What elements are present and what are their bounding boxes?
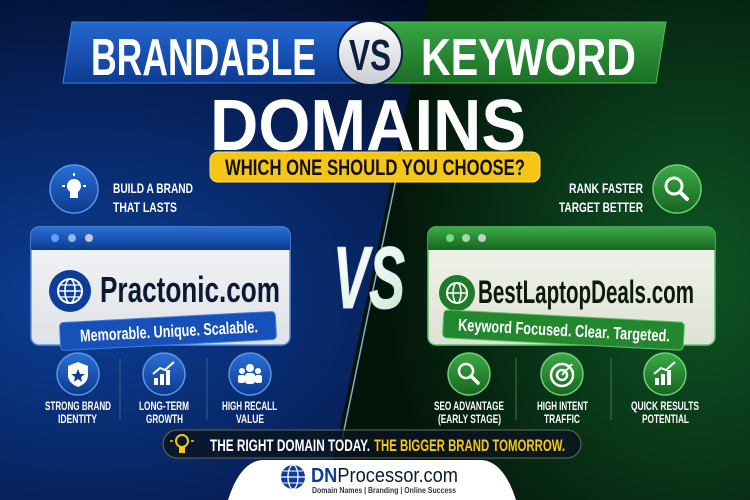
bottom slogan bar: THE RIGHT DOMAIN TODAY.: [210, 436, 370, 455]
title banner: [63, 21, 666, 87]
icon: bulb: [170, 435, 194, 453]
divider light line: [342, 150, 402, 440]
panel: brandable browser window: [31, 227, 290, 351]
footer logo tab: DNProcessor.com: [311, 465, 458, 487]
bottom slogan bar: THE BIGGER BRAND TOMORROW.: [374, 436, 565, 455]
left tagline with lightbulb icon: BUILD A BRAND: [113, 180, 193, 196]
icon: globe: [439, 275, 475, 311]
label: quick results potential: QUICK RESULTS: [631, 399, 699, 413]
label: high intent traffic: HIGH INTENT: [537, 399, 588, 413]
icon: lightbulb: [50, 165, 98, 213]
right tagline with search icon: RANK FASTER: [569, 180, 643, 196]
icon: logo globe: [281, 465, 305, 489]
tag: keyword focused: Keyword Focused. Clear. Targeted.: [458, 316, 670, 346]
label: quick results potential: [631, 399, 699, 426]
icon: magnifier: [653, 165, 701, 213]
vs badge: VS: [349, 31, 391, 80]
label: high recall value: VALUE: [236, 412, 264, 426]
icon: shield star: [57, 353, 99, 395]
footer logo tab: Domain Names | Branding | Online Success: [312, 486, 456, 495]
icon: growth chart: [644, 353, 686, 395]
footer logo tab: [228, 460, 516, 500]
label: long-term growth: GROWTH: [146, 412, 183, 426]
label: high recall value: [222, 399, 277, 426]
panel: keyword browser window: [428, 227, 715, 350]
label: strong brand identity: STRONG BRAND: [45, 399, 111, 413]
label: high intent traffic: TRAFFIC: [544, 412, 580, 426]
label: seo advantage: [434, 399, 504, 426]
icon: growth chart: [143, 353, 185, 395]
icon: search: [448, 353, 490, 395]
bottom slogan bar: [163, 430, 581, 458]
tag: keyword focused: [442, 310, 685, 350]
heading: DOMAINS: DOMAINS: [210, 86, 526, 166]
vs badge: [338, 21, 402, 85]
label: high recall value: HIGH RECALL: [222, 399, 277, 413]
tag: memorable: Memorable. Unique. Scalable.: [80, 317, 258, 346]
panel: brandable browser window: Practonic.com: [100, 269, 280, 310]
label: long-term growth: [139, 399, 189, 426]
tag: memorable: [59, 311, 277, 351]
icon: target: [541, 353, 583, 395]
left tagline with lightbulb icon: [50, 165, 193, 215]
label: high intent traffic: [537, 399, 588, 426]
right benefits: [434, 353, 699, 426]
label: long-term growth: LONG-TERM: [139, 399, 189, 413]
right tagline with search icon: [559, 165, 701, 215]
subtitle pill: WHICH ONE SHOULD YOU CHOOSE?: [225, 155, 525, 180]
big VS: VS: [333, 228, 405, 327]
right tagline with search icon: TARGET BETTER: [559, 199, 643, 215]
icon: globe: [49, 270, 91, 312]
left tagline with lightbulb icon: THAT LASTS: [113, 199, 177, 215]
subtitle pill: [210, 152, 540, 182]
title banner: KEYWORD: [421, 29, 636, 87]
icon: people: [229, 353, 271, 395]
label: strong brand identity: [45, 399, 111, 426]
label: strong brand identity: IDENTITY: [58, 412, 97, 426]
left benefits: [45, 353, 277, 426]
title banner: BRANDABLE: [91, 29, 316, 87]
label: seo advantage: SEO ADVANTAGE: [434, 399, 504, 413]
label: quick results potential: POTENTIAL: [642, 412, 689, 426]
background: green side: [325, 0, 750, 500]
label: seo advantage: (EARLY STAGE): [438, 412, 501, 426]
